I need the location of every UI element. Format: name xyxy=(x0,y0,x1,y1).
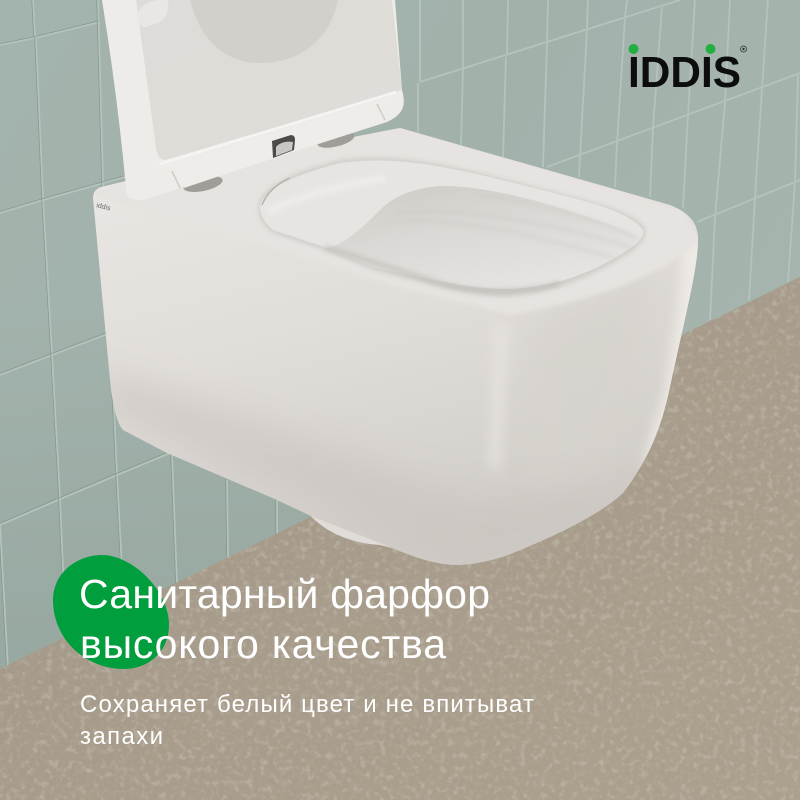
drain base xyxy=(310,515,400,550)
chrome hinge xyxy=(272,135,295,158)
body shading xyxy=(94,194,698,502)
heading xyxy=(79,571,490,667)
bowl inner shaded surface xyxy=(327,186,640,289)
toilet xyxy=(93,0,712,580)
brand logo: IDDIS xyxy=(628,48,741,97)
chrome bolts xyxy=(182,129,356,195)
description text: Сохраняет белый цвет и не впитыват xyxy=(80,691,534,718)
floor terrazzo xyxy=(0,270,800,800)
heading: высокого качества xyxy=(80,621,446,667)
bowl rim xyxy=(258,158,645,297)
toilet body xyxy=(93,128,698,565)
hinge strip xyxy=(181,103,375,188)
seat inner panel xyxy=(136,0,402,160)
seat opening xyxy=(190,0,338,63)
wordmark on ceramic: iddis xyxy=(96,202,112,213)
description text xyxy=(80,691,534,750)
heading: Санитарный фарфор xyxy=(79,571,490,617)
bowl opening xyxy=(260,160,643,291)
seat bumper xyxy=(137,0,168,27)
description text: запахи xyxy=(80,723,163,750)
green accent blob xyxy=(53,555,169,669)
toilet seat lid xyxy=(102,0,404,200)
